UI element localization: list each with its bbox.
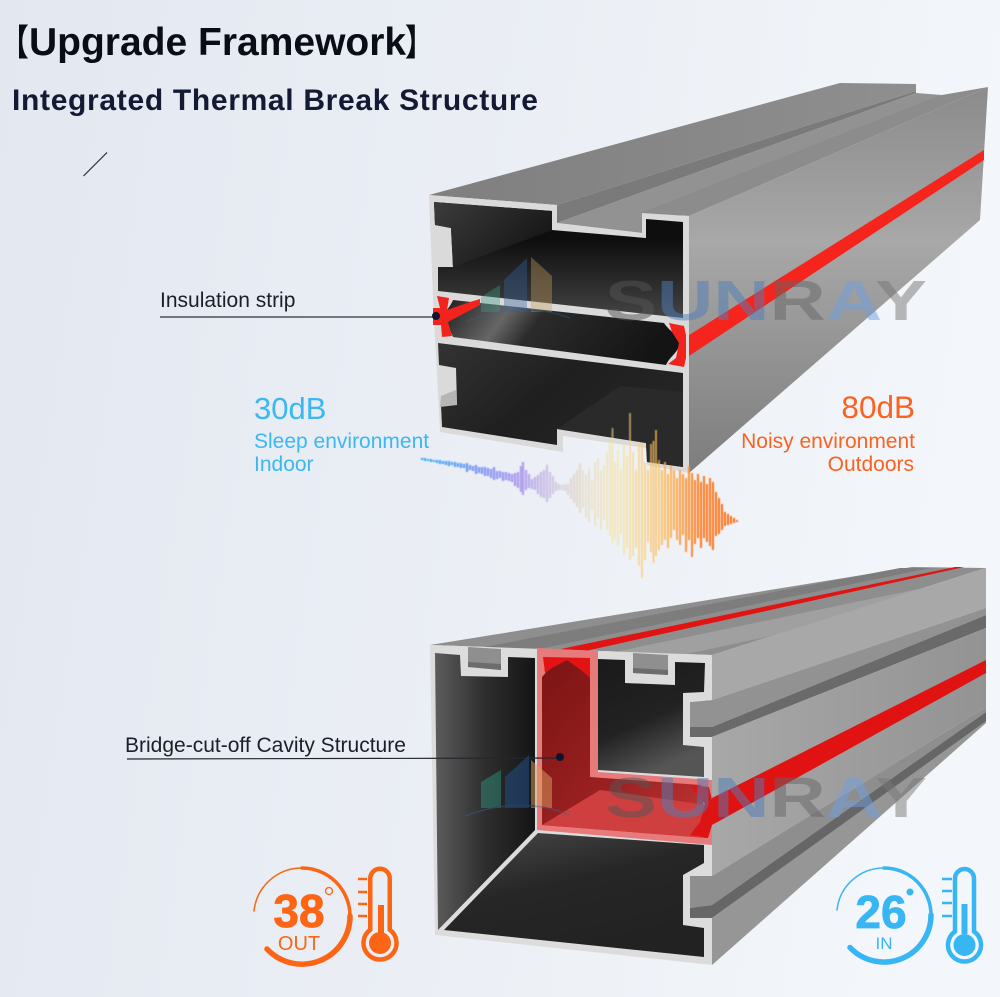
decorative slash bbox=[84, 152, 107, 176]
side upper band bbox=[712, 568, 986, 700]
bottom cavity bbox=[444, 833, 704, 957]
top left flat bbox=[429, 83, 916, 205]
side groove 2 bbox=[690, 707, 986, 918]
watermark: top bbox=[465, 257, 927, 333]
watermark text: SUN R AY bbox=[605, 766, 927, 830]
lower cavity bbox=[438, 343, 683, 467]
indoor noise label: Sleep environment bbox=[254, 430, 429, 453]
channel wall bbox=[557, 91, 916, 223]
top notches bbox=[468, 647, 668, 675]
watermark text: SUN R AY bbox=[605, 269, 927, 333]
title: Upgrade Framework bbox=[29, 21, 406, 64]
red band top bbox=[686, 150, 984, 358]
subtitle: Integrated Thermal Break Structure bbox=[12, 84, 539, 117]
temperature icon: 26 in: IN bbox=[876, 934, 892, 953]
side groove 1 bbox=[690, 608, 986, 737]
top right flat bbox=[642, 87, 988, 216]
front frame bbox=[430, 645, 712, 965]
sound wave bbox=[422, 413, 737, 578]
front frame bbox=[429, 195, 689, 473]
callout: insulation strip: Insulation strip bbox=[160, 289, 295, 312]
temperature icon: 38 out: 38 bbox=[273, 885, 325, 937]
watermark building icon bbox=[465, 257, 570, 322]
small cavity bbox=[598, 659, 705, 777]
red caps bbox=[543, 657, 590, 678]
top face bbox=[430, 567, 986, 655]
callout: bridge-cut-off cavity: Bridge-cut-off Cavity Structure bbox=[125, 734, 406, 757]
indoor noise label: Indoor bbox=[254, 453, 314, 476]
temperature icon: 26 in: 26 bbox=[855, 886, 907, 938]
outdoor noise label: Outdoors bbox=[828, 453, 914, 476]
outdoor noise label: 80dB bbox=[841, 389, 915, 425]
top aluminium profile bbox=[429, 83, 988, 473]
top red band bbox=[556, 567, 964, 652]
red cavity frame bbox=[537, 648, 712, 845]
thermometer bbox=[358, 869, 396, 960]
temperature icon: 38 out: OUT bbox=[278, 933, 320, 955]
temperature icon: 26 in bbox=[837, 868, 981, 962]
side middle band bbox=[712, 628, 986, 876]
indoor noise label: 30dB bbox=[254, 391, 326, 426]
title: 】 bbox=[405, 22, 434, 63]
title: 【 bbox=[0, 22, 29, 63]
thermometer bbox=[942, 869, 981, 961]
upper cavity ceiling bbox=[434, 202, 552, 267]
outdoor noise label: Noisy environment bbox=[741, 430, 915, 453]
temperature icon: 38 out bbox=[254, 868, 396, 964]
red cavity interior bbox=[542, 660, 707, 838]
callout: insulation strip bbox=[160, 289, 440, 320]
channel floor bbox=[557, 93, 942, 233]
upper cavity bbox=[434, 202, 683, 318]
middle cavity bbox=[442, 300, 679, 365]
indoor noise label bbox=[254, 391, 429, 476]
red insulation corners bbox=[433, 296, 480, 337]
bottom aluminium profile bbox=[430, 567, 986, 965]
watermark building icon bbox=[465, 755, 570, 816]
side red band bbox=[712, 660, 986, 825]
outdoor noise label bbox=[741, 389, 915, 476]
side lower band bbox=[712, 721, 986, 965]
left cavity bbox=[435, 653, 535, 930]
callout: bridge-cut-off cavity bbox=[125, 734, 564, 761]
watermark: bottom bbox=[465, 755, 927, 830]
right face bbox=[689, 87, 988, 473]
